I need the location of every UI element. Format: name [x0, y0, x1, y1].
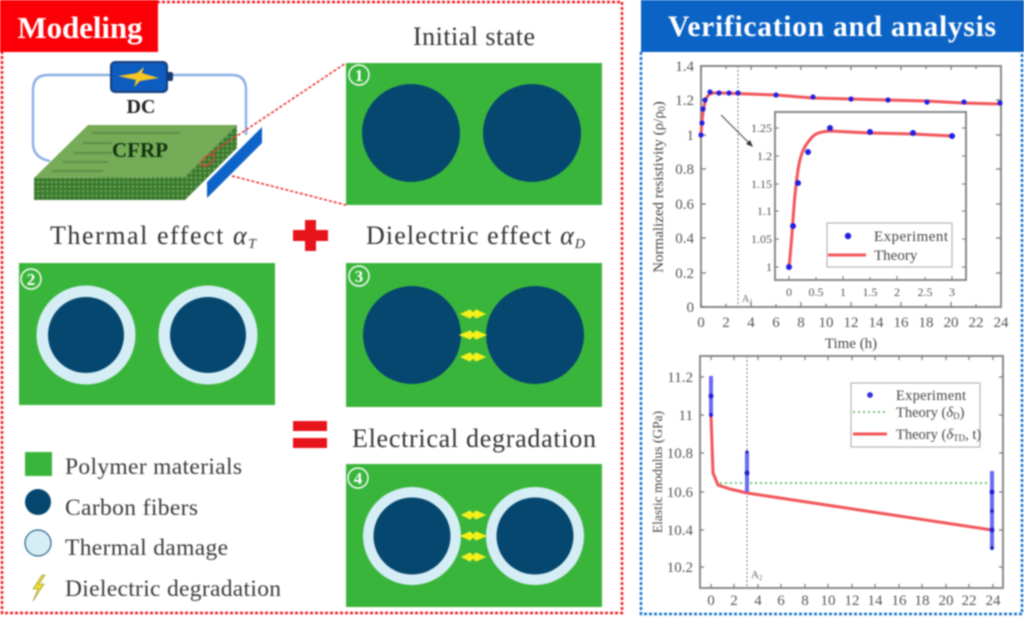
inset y labels: 1.1	[757, 204, 772, 218]
inset x labels: 2	[894, 285, 900, 299]
marker: A2: 2	[759, 574, 763, 582]
x axis labels: 8	[801, 593, 809, 609]
marker: A1: 1	[749, 298, 753, 306]
heading: thermal effect: T	[248, 237, 257, 252]
arrow to inset	[721, 115, 753, 147]
x axis labels: 8	[797, 315, 805, 331]
diagram: CFRP specimen under DC	[33, 62, 346, 205]
x axis labels: 14	[868, 593, 883, 609]
chart: normalized resistivity over time	[651, 59, 1009, 352]
electrode plate	[207, 127, 262, 198]
x axis labels: 0	[707, 593, 715, 609]
inset x labels: 1.5	[862, 285, 878, 299]
inset y labels: 1.15	[751, 177, 772, 191]
inset y labels: 1.2	[757, 149, 772, 163]
panel 4: electrical degradation	[346, 464, 602, 607]
zoom guide lines	[213, 63, 346, 205]
heading: Verification and analysis: Verification and analysis	[668, 11, 996, 43]
x axis labels: 22	[962, 593, 976, 609]
label: DC: DC	[127, 96, 155, 118]
y axis labels	[667, 370, 694, 576]
x axis labels: 24	[994, 315, 1009, 331]
legend: materials	[25, 452, 281, 602]
inset y labels	[751, 121, 772, 274]
panel 1: initial state	[346, 63, 602, 205]
inset theory curve	[789, 131, 952, 267]
y axis labels	[675, 59, 694, 316]
marker: A1: A	[742, 294, 749, 305]
error bars and points	[708, 376, 994, 550]
legend item: carbon fibers	[25, 489, 198, 521]
specimen: CFRP block	[34, 125, 237, 200]
chart legend: D	[953, 411, 960, 421]
inset chart	[751, 112, 966, 299]
experiment points	[698, 89, 1003, 138]
marker: A2: A	[751, 569, 759, 581]
heading: initial state: Initial state	[413, 22, 535, 51]
x axis labels: 6	[772, 315, 780, 331]
inset x labels: 0	[786, 285, 792, 299]
icon: plus	[293, 220, 328, 251]
heading: Modeling	[0, 0, 158, 52]
x axis labels: 4	[754, 593, 762, 609]
y axis labels: 10.4	[667, 523, 694, 539]
heading: Verification and analysis	[641, 0, 1024, 52]
inset y labels: 1	[766, 260, 772, 274]
specimen: CFRP block: CFRP	[112, 138, 168, 162]
chart: elastic modulus over time	[650, 356, 1003, 609]
x axis labels: 10	[818, 315, 834, 331]
chart legend: Theory (δ	[896, 405, 953, 421]
y axis title: 0	[657, 106, 668, 111]
x axis labels: 22	[968, 315, 984, 331]
heading: Modeling: Modeling	[18, 10, 143, 45]
y axis labels: 11	[679, 408, 693, 424]
y axis labels: 0.4	[675, 231, 694, 247]
y axis labels: 1.4	[675, 59, 694, 75]
x axis labels: 20	[938, 593, 954, 609]
x axis title: Time (h)	[825, 336, 877, 352]
y axis labels: 1	[686, 128, 694, 144]
legend item: dielectric degradation: Dielectric degradation	[65, 576, 281, 602]
panel 4: electrical degradation: 4	[354, 469, 363, 488]
chart legend: TD	[953, 433, 966, 443]
y axis labels: 0.6	[675, 197, 694, 213]
x axis labels: 20	[944, 315, 958, 331]
y axis title: Elastic modulus (GPa)	[650, 411, 665, 533]
inset y labels: 1.25	[751, 121, 772, 135]
legend item: polymer materials: Polymer materials	[65, 454, 242, 480]
chart legend	[851, 383, 981, 447]
heading: electrical degradation: Electrical degradation	[352, 424, 596, 453]
panel 1: initial state: 1	[355, 66, 363, 85]
icon: DC battery	[111, 62, 173, 92]
x axis labels: 2	[722, 315, 730, 331]
inset x labels: 1	[840, 285, 846, 299]
x axis labels: 2	[730, 593, 738, 609]
heading: dielectric effect: D	[574, 237, 585, 252]
inset y labels: 1.05	[751, 232, 772, 246]
inset x labels: 0.5	[808, 285, 824, 299]
theory curve	[701, 93, 1001, 135]
x axis labels: 16	[894, 315, 909, 331]
inset x labels: 3	[949, 285, 955, 299]
panel 2: thermal effect: 2	[27, 270, 35, 289]
x axis labels: 10	[820, 593, 836, 609]
chart legend: )	[960, 405, 965, 421]
y axis labels: 10.2	[667, 560, 693, 576]
x axis labels: 4	[747, 315, 755, 331]
panel 3: dielectric effect: 3	[355, 267, 363, 286]
chart legend: Theory (δ	[896, 427, 953, 443]
x axis labels	[697, 315, 1009, 331]
y axis labels: 11.2	[667, 370, 693, 386]
y axis labels: 0.2	[675, 266, 694, 282]
y axis labels: 1.2	[675, 93, 694, 109]
panel: verification and analysis	[641, 0, 1024, 614]
heading: thermal effect: Thermal effect α	[50, 221, 247, 250]
x axis labels: 6	[777, 593, 785, 609]
x axis labels	[707, 593, 1001, 609]
panel: modeling	[0, 0, 622, 613]
y axis labels: 0	[686, 300, 694, 316]
inset legend	[827, 223, 952, 267]
x axis labels: 24	[986, 593, 1001, 609]
chart legend: , t)	[965, 427, 981, 443]
heading: dielectric effect: Dielectric effect α	[366, 221, 574, 250]
inset x labels: 2.5	[918, 285, 932, 299]
inset legend: Experiment	[874, 229, 949, 245]
legend item: carbon fibers: Carbon fibers	[65, 495, 198, 521]
icon: equals	[293, 421, 327, 448]
x axis labels: 18	[918, 315, 934, 331]
y axis labels: 0.8	[675, 162, 694, 178]
inset x labels	[786, 285, 955, 299]
x axis labels: 12	[844, 315, 858, 331]
theory line: combined	[711, 415, 992, 530]
x axis labels: 12	[844, 593, 860, 609]
legend item: thermal damage: Thermal damage	[65, 535, 228, 561]
panel 2: thermal effect	[19, 263, 275, 405]
x axis labels: 16	[892, 593, 907, 609]
y axis title: Normalized resistivity (ρ/ρ	[651, 111, 667, 273]
chart legend: Experiment	[896, 388, 966, 404]
x axis labels: 0	[697, 315, 705, 331]
panel 3: dielectric effect	[346, 263, 602, 407]
y axis labels: 10.6	[667, 485, 694, 501]
x axis labels: 18	[914, 593, 930, 609]
y axis labels: 10.8	[667, 446, 693, 462]
inset legend: Theory	[874, 248, 918, 264]
legend item: thermal damage	[25, 530, 228, 561]
x axis labels: 14	[868, 315, 884, 331]
inset experiment points	[786, 125, 955, 270]
zoom region marker	[199, 152, 217, 168]
theory line: dielectric	[720, 482, 992, 484]
y axis title: )	[651, 101, 667, 106]
